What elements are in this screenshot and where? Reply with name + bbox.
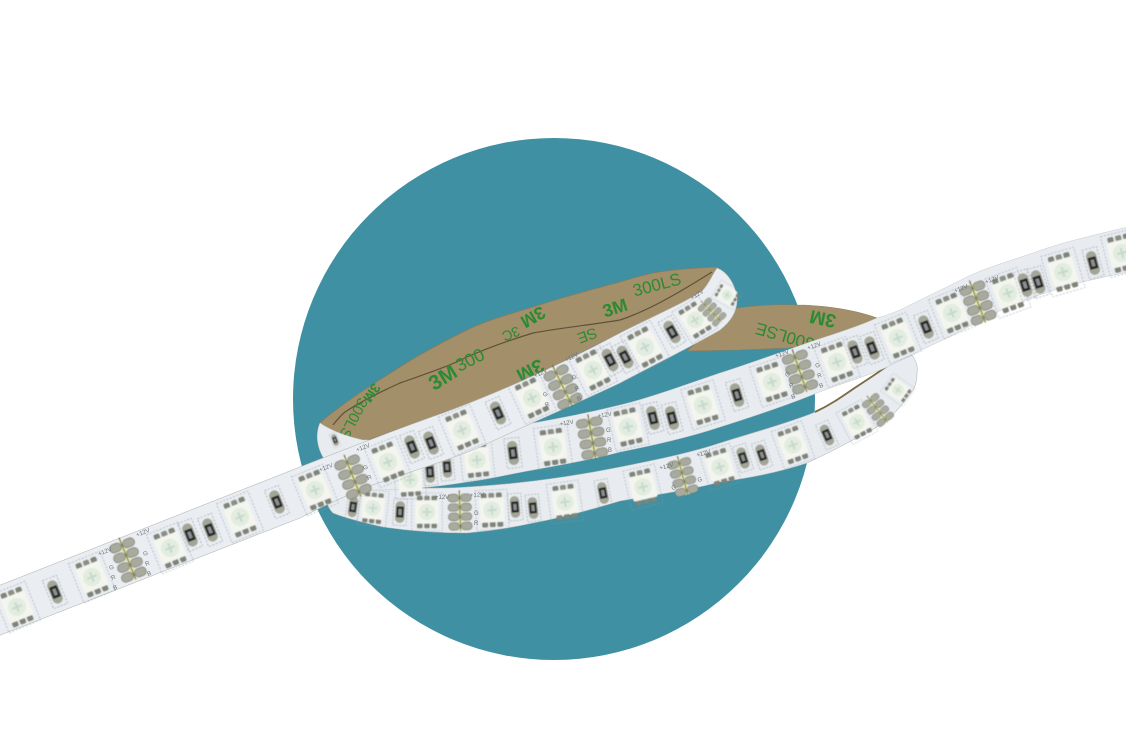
LED strip: lower run: R [474, 521, 479, 527]
LED strip: lower run: +12V [435, 495, 449, 501]
LED strip: front run: R [574, 385, 581, 393]
tape backing: right brown loop: 3M [808, 305, 838, 331]
LED strip: front run: G [542, 391, 549, 399]
LED strip: front run [0, 268, 743, 636]
LED strip: front run: B [147, 571, 152, 578]
LED strip: middle run: G [785, 372, 791, 379]
tape backing: right brown loop [687, 305, 877, 353]
LED strip: front run: +12V [564, 352, 580, 364]
LED strip: front run: R [111, 574, 117, 582]
middle run components [329, 229, 1126, 500]
LED strip: front run: G [363, 464, 369, 472]
adhesive tape print: SE [575, 324, 599, 346]
LED strip: front run: +12V [690, 289, 705, 302]
adhesive tape print: 3M [600, 295, 630, 321]
adhesive tape print: 3M [360, 380, 384, 406]
LED strip: front run: +12V [356, 443, 371, 454]
LED strip: front run: B [113, 585, 118, 592]
LED strip: lower run: +12V [470, 493, 484, 499]
LED strip: middle run: +12V [775, 350, 790, 360]
adhesive tape print [335, 269, 683, 441]
LED strip: middle run: R [817, 373, 823, 380]
LED strip: front run: +12V [98, 547, 113, 558]
LED strip: middle run: B [608, 448, 612, 454]
tape backing: right brown loop: 300LSE [753, 319, 817, 353]
LED strip: lower run: +12V [659, 462, 674, 472]
lower run components [345, 373, 916, 531]
LED strip: middle run: G [815, 363, 821, 370]
front run components [0, 280, 743, 633]
adhesive tape print: 300LS [335, 395, 371, 441]
LED strip: middle run: +12V [807, 342, 822, 352]
adhesive tape print: 300LS [631, 269, 683, 301]
adhesive tape print: 3M [513, 354, 547, 386]
LED strip: middle run: B [819, 383, 824, 390]
LED strip: front run: B [576, 396, 582, 403]
LED strip: front run: +12V [136, 528, 151, 539]
LED strip: lower run: G [697, 477, 703, 484]
LED strip: middle run: R [789, 383, 795, 390]
adhesive tape print: 300 [452, 344, 488, 376]
LED strip: lower run: +12V [696, 449, 711, 459]
LED strip: front run: +12V [319, 463, 334, 474]
LED strip: middle run [317, 227, 1126, 500]
adhesive tape print: 3M [517, 302, 549, 332]
LED strip: lower run: G [671, 485, 677, 492]
LED strip: front run: G [109, 564, 115, 572]
LED strip: front run: G [571, 374, 578, 382]
LED strip: middle run: B [791, 394, 796, 401]
LED strip: middle run: G [606, 428, 611, 434]
LED strip: front run: +12V [533, 368, 549, 380]
teal circle [293, 138, 815, 660]
LED strip: middle run: R [607, 438, 612, 444]
LED strip: lower run: G [474, 511, 479, 517]
LED strip: front run: R [544, 401, 551, 409]
LED strip: middle run: +12V [954, 284, 969, 295]
LED strip: middle run: +12V [985, 275, 1000, 286]
adhesive tape print: 3M [425, 361, 461, 395]
LED strip: front run: R [145, 560, 151, 568]
tape backing: rear brown loop [320, 267, 717, 441]
LED strip: front run: G [143, 550, 149, 558]
adhesive tape print: 3C [500, 323, 522, 345]
LED strip: front run: R [367, 474, 373, 482]
LED strip: lower run [327, 355, 917, 533]
LED strip: middle run: +12V [559, 420, 574, 428]
LED strip: middle run: +12V [597, 412, 612, 420]
